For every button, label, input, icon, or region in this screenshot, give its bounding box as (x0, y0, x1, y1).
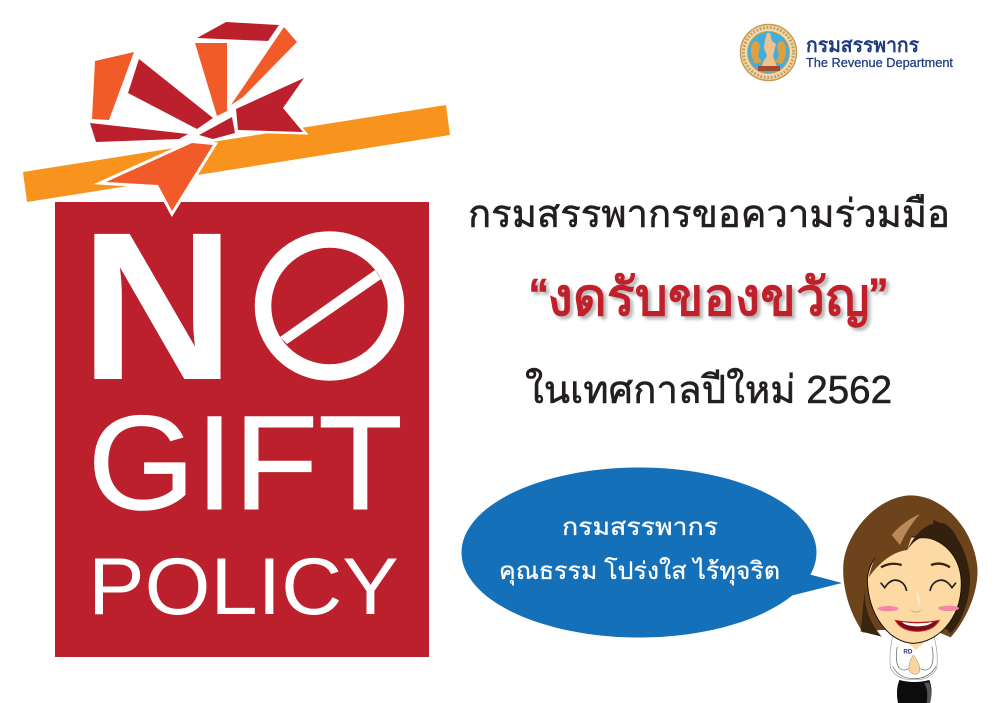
POLICY heading: POLICY (88, 542, 399, 632)
neck (905, 640, 927, 650)
bow (90, 22, 304, 211)
line 1: กรมสรรพากรขอความร่วมมือ (468, 193, 950, 236)
GIFT heading: GIFT (88, 389, 403, 538)
main message (468, 193, 950, 412)
NO heading: N (80, 188, 235, 424)
ribbon band (23, 105, 450, 202)
speech bubble (462, 468, 842, 638)
logo: Revenue Department seal (740, 24, 796, 80)
line 2 highlight: “งดรับของขวัญ” (530, 269, 887, 327)
bubble text (499, 514, 780, 586)
cheeks (878, 606, 898, 611)
sleeves (893, 647, 936, 679)
NO heading (80, 188, 407, 424)
hands (909, 655, 920, 674)
gift box panel (55, 188, 429, 657)
bubble text: คุณธรรม โปร่งใส ไร้ทุจริต (499, 557, 780, 586)
mouth (895, 620, 939, 631)
nose (910, 609, 922, 613)
character: smiling woman giving wai greeting (843, 495, 978, 703)
fringe (869, 507, 932, 577)
eyes (881, 580, 907, 591)
line 2 shadow: “งดรับของขวัญ” (533, 272, 890, 330)
face (867, 537, 961, 643)
logo: department name: กรมสรรพากร (806, 35, 919, 57)
shirt (890, 637, 937, 680)
NO heading: O (252, 203, 407, 415)
skirt (897, 680, 932, 703)
hair back (843, 495, 978, 637)
RD badge: RD (903, 649, 913, 656)
logo: department name (806, 35, 954, 70)
eyebrows (881, 564, 902, 567)
line 3: ในเทศกาลปีใหม่ 2562 (525, 368, 892, 412)
bubble text: กรมสรรพากร (562, 514, 718, 541)
logo: department name: The Revenue Department (806, 56, 954, 70)
